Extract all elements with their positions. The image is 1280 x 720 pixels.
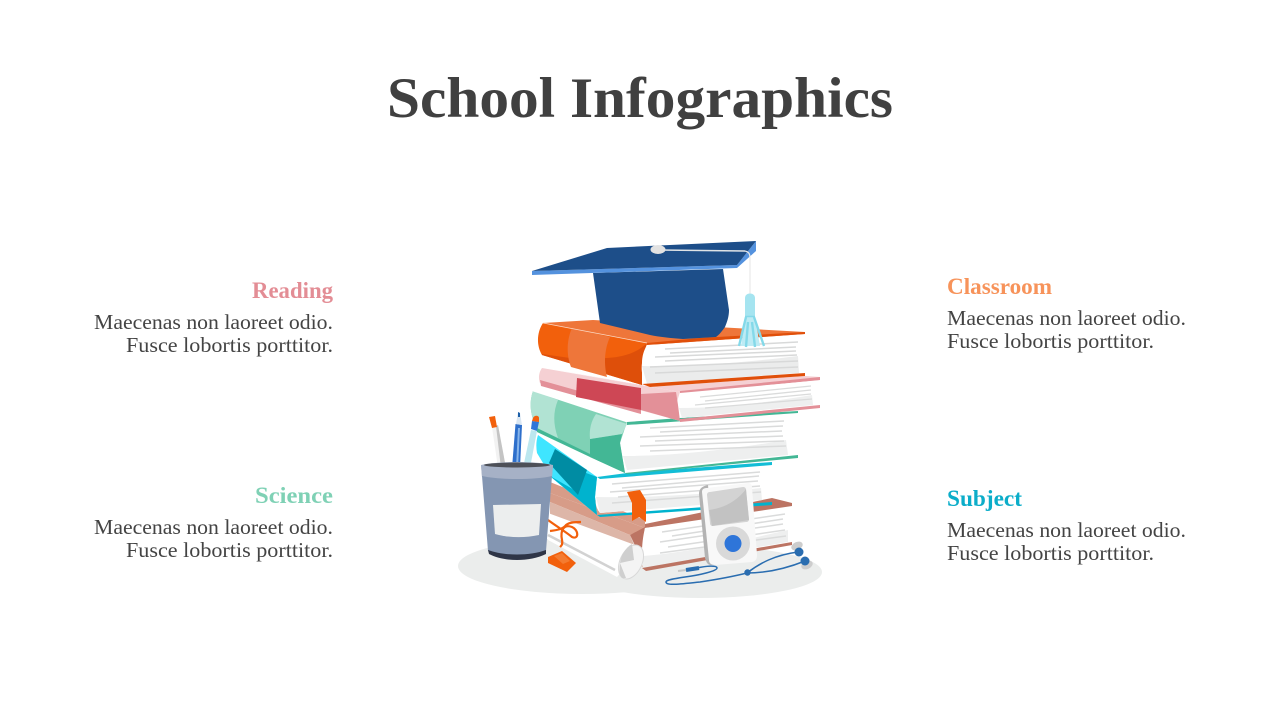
book: brown (550, 482, 792, 571)
scroll with ribbon (548, 513, 649, 583)
pencils (489, 412, 539, 468)
text block: reading: Fusce lobortis porttitor. (126, 333, 333, 357)
text block: subject: Fusce lobortis porttitor. (947, 541, 1154, 565)
text block: science: Fusce lobortis porttitor. (126, 538, 333, 562)
graduation cap (532, 241, 756, 339)
text block: reading: Maecenas non laoreet odio. (94, 310, 333, 334)
text block: classroom: Maecenas non laoreet odio. (947, 306, 1186, 330)
text block: classroom: Fusce lobortis porttitor. (947, 329, 1154, 353)
text block: classroom (947, 274, 1186, 353)
text block: science: Maecenas non laoreet odio. (94, 515, 333, 539)
book: orange (538, 320, 805, 387)
text block: science: Science (255, 483, 333, 508)
text block: reading: Reading (252, 278, 333, 303)
cup label (493, 504, 541, 537)
ribbon (548, 520, 581, 547)
book: cyan (536, 435, 772, 517)
bookmark (627, 490, 646, 522)
tassel (739, 294, 764, 347)
text block: subject: Subject (947, 486, 1022, 511)
text block: classroom: Classroom (947, 274, 1052, 299)
text block: science (94, 483, 333, 562)
ground shadow (458, 538, 822, 598)
book: green (531, 391, 798, 474)
pencil cup with pencils (481, 412, 553, 560)
title: School Infographics (387, 67, 893, 130)
text block: reading (94, 278, 333, 357)
red book label (576, 378, 641, 410)
sharpener (548, 551, 576, 572)
music player (699, 483, 757, 565)
book: pink (539, 368, 820, 422)
illustration: stack of school items (458, 241, 822, 598)
earphones (666, 540, 814, 584)
text block: subject (947, 486, 1186, 565)
text block: subject: Maecenas non laoreet odio. (947, 518, 1186, 542)
